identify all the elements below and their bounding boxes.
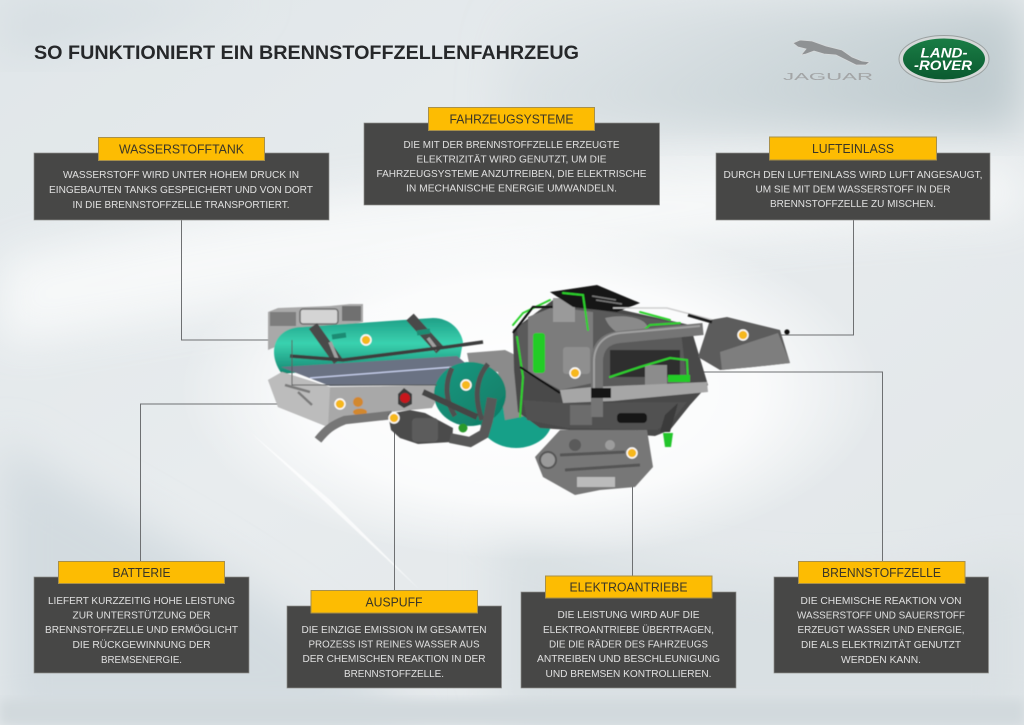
component: hydrogen tank rear: [274, 317, 483, 374]
text: Elektroantriebe: DIE DIE RÄDER DES FAHRZEUGS: [549, 638, 708, 650]
component: fuel cell stack: [513, 285, 713, 436]
component: battery: [268, 356, 470, 427]
text: Batterie: [45, 596, 239, 666]
wordmark: Jaguar: JAGUAR: [783, 71, 874, 83]
logo: Land Rover: -ROVER: [914, 57, 973, 73]
text: Brennstoffzelle: DIE CHEMISCHE REAKTION VON: [800, 596, 962, 607]
component: platform: [560, 382, 708, 403]
component: exhaust pipe: [318, 415, 392, 440]
heading: Lufteinlass: LUFTEINLASS: [812, 142, 894, 156]
component: hydrogen tank front: [423, 350, 552, 448]
text: Elektroantriebe: ANTREIBEN UND BESCHLEUNIGUNG: [537, 654, 720, 665]
heading: Elektroantriebe: ELEKTROANTRIEBE: [570, 580, 688, 594]
text: Brennstoffzelle: ERZEUGT WASSER UND ENERGIE,: [798, 625, 964, 636]
panel: Batterie: [34, 562, 249, 673]
panel: Fahrzeugsysteme: [364, 108, 660, 205]
panel: Wasserstofftank: [34, 138, 329, 220]
title: SO FUNKTIONIERT EIN BRENNSTOFFZELLENFAHRZEUG: [34, 42, 579, 64]
heading: Wasserstofftank: WASSERSTOFFTANK: [119, 142, 245, 156]
text: Batterie: DIE RÜCKGEWINNUNG DER: [72, 639, 211, 651]
logo: Jaguar: [783, 40, 874, 83]
panel: Brennstoffzelle: [774, 562, 988, 673]
text: Wasserstofftank: [49, 170, 314, 211]
text: Brennstoffzelle: WASSERSTOFF UND SAUERSTOFF: [797, 610, 965, 622]
component: orange connectors: [353, 397, 367, 416]
component: upper control unit: [268, 304, 363, 350]
text: Lufteinlass: BRENNSTOFFZELLE ZU MISCHEN.: [770, 199, 936, 210]
heading: Brennstoffzelle: [798, 562, 965, 584]
text: Brennstoffzelle: [797, 596, 965, 666]
text: Wasserstofftank: WASSERSTOFF WIRD UNTER HOHEM DRUCK IN: [63, 170, 299, 181]
thin inner line across battery: [292, 340, 437, 385]
text: Fahrzeugsysteme: ELEKTRIZITÄT WIRD GENUTZT, UM DIE: [416, 154, 607, 166]
component: lower block: [523, 400, 687, 447]
component: humidifier and pipe: [388, 398, 492, 444]
component: electric drive unit: [535, 430, 653, 495]
heading: Brennstoffzelle: BRENNSTOFFZELLE: [822, 566, 941, 580]
component: charge air pipe: [591, 326, 703, 417]
text: Lufteinlass: DURCH DEN LUFTEINLASS WIRD LUFT ANGESAUGT,: [724, 170, 982, 181]
component: air intake: [688, 315, 790, 370]
heading: Fahrzeugsysteme: [428, 108, 594, 130]
text: Batterie: BREMSENERGIE.: [101, 655, 182, 666]
logo: Land Rover: LAND-: [920, 44, 968, 60]
heading: Wasserstofftank: [98, 138, 264, 160]
text: Fahrzeugsysteme: FAHRZEUGSYSTEME ANZUTREIBEN, DIE ELEKTRISCHE: [376, 169, 647, 180]
text: Fahrzeugsysteme: DIE MIT DER BRENNSTOFFZELLE ERZEUGTE: [404, 140, 620, 151]
heading: Lufteinlass: [770, 137, 936, 160]
heading: Fahrzeugsysteme: FAHRZEUGSYSTEME: [450, 112, 574, 126]
text: Wasserstofftank: IN DIE BRENNSTOFFZELLE TRANSPORTIERT.: [72, 200, 290, 211]
heading: Auspuff: [311, 590, 478, 613]
text: Brennstoffzelle: DIE ALS ELEKTRIZITÄT GENUTZT: [801, 639, 962, 651]
text: Lufteinlass: [724, 170, 982, 210]
marker dots: [335, 330, 748, 458]
text: Auspuff: DER CHEMISCHEN REAKTION IN DER: [302, 654, 486, 665]
icon: leaping jaguar: [793, 40, 870, 65]
text: Elektroantriebe: DIE LEISTUNG WIRD AUF DIE: [558, 610, 700, 621]
text: Fahrzeugsysteme: [376, 140, 647, 194]
text: Batterie: ZUR UNTERSTÜTZUNG DER: [72, 610, 211, 622]
text: Auspuff: PROZESS IST REINES WASSER AUS: [308, 640, 480, 650]
component: red button: [398, 388, 412, 408]
panel: Lufteinlass: [716, 137, 990, 220]
text: Elektroantriebe: ELEKTROANTRIEBE ÜBERTRAGEN,: [543, 624, 714, 636]
text: Batterie: BRENNSTOFFZELLE UND ERMÖGLICHT: [45, 624, 239, 636]
text: Lufteinlass: UM SIE MIT DEM WASSERSTOFF IN DER: [756, 184, 951, 196]
panel: Elektroantriebe: [521, 576, 736, 688]
text: Elektroantriebe: [537, 610, 720, 680]
text: Auspuff: DIE EINZIGE EMISSION IM GESAMTEN: [302, 625, 486, 636]
panel: Auspuff: [287, 590, 502, 688]
text: Fahrzeugsysteme: IN MECHANISCHE ENERGIE UMWANDELN.: [406, 184, 617, 194]
fuel cell powertrain illustration: [268, 285, 790, 495]
heading: Batterie: [58, 562, 224, 584]
text: Brennstoffzelle: WERDEN KANN.: [841, 655, 921, 666]
text: Wasserstofftank: EINGEBAUTEN TANKS GESPEICHERT UND VON DORT: [49, 185, 314, 196]
text: Elektroantriebe: UND BREMSEN KONTROLLIEREN.: [546, 669, 712, 680]
text: Batterie: LIEFERT KURZZEITIG HOHE LEISTUNG: [48, 596, 235, 607]
heading: Batterie: BATTERIE: [112, 566, 170, 580]
heading: Auspuff: AUSPUFF: [366, 596, 423, 610]
text: Auspuff: BRENNSTOFFZELLE.: [344, 669, 444, 680]
text: Auspuff: [302, 625, 486, 680]
logo: Land Rover: [899, 36, 989, 82]
connector lines: [140, 220, 882, 590]
heading: Elektroantriebe: [546, 576, 712, 598]
